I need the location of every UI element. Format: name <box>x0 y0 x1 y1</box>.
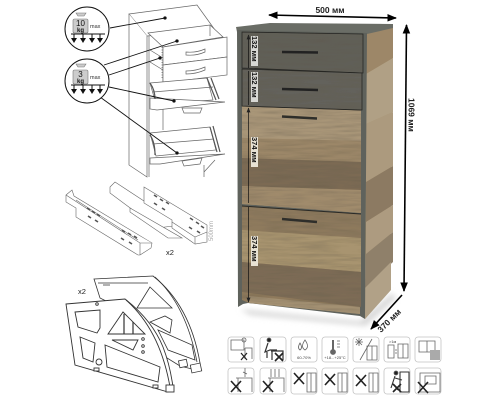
rear bracket <box>94 276 202 373</box>
line drawing: open cabinet with load callouts <box>129 5 227 177</box>
second drawer <box>242 69 362 110</box>
handle <box>282 116 317 118</box>
callout: 10 kg max: kg <box>77 28 84 34</box>
tilting shoe compartment 1 <box>150 78 225 113</box>
upper door <box>242 106 361 213</box>
furniture photo: chest of drawers <box>236 23 396 326</box>
tilting shoe compartment 2 <box>150 126 225 166</box>
handle <box>282 51 318 54</box>
row 2 <box>228 368 441 394</box>
dimension: drawer and door heights <box>248 35 250 302</box>
soft shadow <box>240 293 396 326</box>
side panel <box>365 27 393 319</box>
callout: 3 kg max: max <box>90 75 101 81</box>
pictograms row 2 <box>231 368 440 393</box>
callout: 10 kg max: 10 <box>76 19 85 28</box>
callout: 10 kg max: max <box>90 24 101 30</box>
upper drawers <box>148 25 227 83</box>
upper drawer <box>242 32 363 73</box>
label: 500 mm rotated: 500mm <box>209 221 215 241</box>
dimension: width 500 mm <box>269 5 396 18</box>
dimension: depth 370 mm: 370 мм <box>375 307 403 334</box>
handle <box>282 219 317 222</box>
dimension: depth 370 mm <box>371 295 403 334</box>
front bracket <box>66 299 174 392</box>
lower door <box>242 206 361 314</box>
shoe compartment brackets diagram <box>66 276 202 392</box>
label: distance: >1м <box>389 339 397 344</box>
label: x2 brackets: x2 <box>78 287 86 296</box>
label: 132 mm lower: 132 мм <box>250 72 259 98</box>
callout: 10 kg max <box>65 7 109 51</box>
callout: 3 kg max: kg <box>77 79 84 85</box>
callout: 3 kg max <box>65 59 109 103</box>
care and usage icon grid <box>228 337 441 394</box>
handle <box>282 89 318 90</box>
label: 132 mm upper: 132 мм <box>250 36 259 62</box>
label: humidity: 60-70% <box>297 355 311 360</box>
label: 374 mm upper: 374 мм <box>250 137 259 163</box>
dark frame <box>237 30 367 319</box>
runner left <box>66 190 152 255</box>
label: 374 mm lower: 374 мм <box>250 236 259 262</box>
pictograms row 1 <box>231 338 440 361</box>
dimension: height 1069 mm: 1069 мм <box>406 98 416 132</box>
runner right <box>110 182 207 244</box>
label: x2 runners: x2 <box>166 248 174 257</box>
leader lines <box>100 17 178 154</box>
top panel <box>236 23 393 34</box>
dimension: width 500 mm: 500 мм <box>315 5 345 15</box>
callout: 3 kg max: 3 <box>78 70 83 79</box>
cabinet outline <box>129 5 215 177</box>
label: temperature: +18...+25°C <box>324 355 346 360</box>
row 1 <box>228 337 441 362</box>
drawer runners diagram <box>66 182 215 257</box>
